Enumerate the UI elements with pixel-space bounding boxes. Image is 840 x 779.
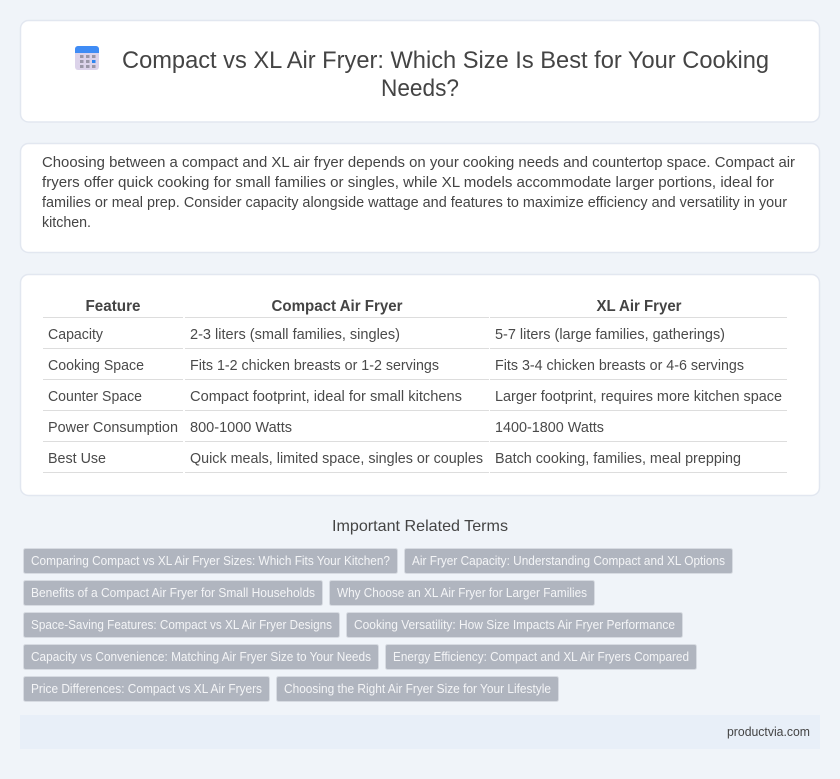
tag 2: Air Fryer Capacity: Understanding Compact and XL Options — [412, 554, 725, 568]
icon: calendar — [75, 46, 99, 70]
row: cooking space — [48, 358, 744, 374]
row: cooking space: Fits 3-4 chicken breasts or 4-6 servings — [495, 358, 744, 374]
row: counter space: Larger footprint, requires more kitchen space — [495, 389, 782, 405]
panel: comparison table — [20, 274, 820, 496]
row: best use: Quick meals, limited space, singles or couples — [190, 451, 483, 467]
intro text — [42, 155, 795, 231]
row: capacity — [48, 327, 725, 343]
tag 3: Benefits of a Compact Air Fryer for Small Households — [31, 586, 315, 600]
row: power consumption: 800-1000 Watts — [190, 420, 292, 436]
row: capacity: Capacity — [48, 327, 104, 343]
intro text: kitchen. — [42, 215, 91, 231]
table header — [86, 298, 682, 315]
tag 10: Choosing the Right Air Fryer Size for Your Lifestyle — [284, 682, 551, 696]
intro text: fryers offer quick cooking for small families or singles, while XL models accommodate larger portions, ideal for — [42, 175, 774, 191]
footer: productvia.com — [727, 725, 810, 739]
tag 9 — [24, 676, 270, 702]
tag 6 — [346, 612, 682, 638]
row: best use: Best Use — [48, 451, 106, 467]
tag 1: Comparing Compact vs XL Air Fryer Sizes: Which Fits Your Kitchen? — [31, 554, 390, 568]
table header: Compact Air Fryer — [272, 298, 402, 315]
related term tags — [24, 548, 732, 702]
heading: related terms: Important Related Terms — [332, 518, 508, 535]
panel: intro paragraph — [20, 144, 820, 252]
tag 3 — [24, 580, 322, 606]
intro text: families or meal prep. Consider capacity alongside wattage and features to maximize efficiency and versatility in your — [42, 195, 787, 211]
row: capacity: 2-3 liters (small families, singles) — [190, 327, 400, 343]
row: best use — [48, 451, 741, 467]
tag 5 — [24, 612, 340, 638]
tag 8 — [386, 644, 696, 670]
tag 5: Space-Saving Features: Compact vs XL Air Fryer Designs — [31, 618, 332, 632]
tag 4 — [330, 580, 594, 606]
title: Compact vs XL Air Fryer: Which Size Is Best for Your Cooking — [122, 47, 769, 74]
tag 10 — [276, 676, 558, 702]
row: power consumption — [48, 420, 604, 436]
title: Needs? — [381, 75, 459, 102]
row: counter space: Compact footprint, ideal for small kitchens — [190, 389, 462, 405]
table grid lines — [43, 318, 787, 472]
tag 1 — [24, 548, 398, 574]
tag 2 — [404, 548, 732, 574]
row: best use: Batch cooking, families, meal prepping — [495, 451, 741, 467]
row: cooking space: Fits 1-2 chicken breasts or 1-2 servings — [190, 358, 439, 374]
row: counter space: Counter Space — [48, 389, 142, 405]
footer — [20, 715, 820, 749]
tag 4: Why Choose an XL Air Fryer for Larger Families — [337, 586, 587, 600]
row: cooking space: Cooking Space — [48, 358, 144, 374]
row: power consumption: 1400-1800 Watts — [495, 420, 604, 436]
table header: XL Air Fryer — [596, 298, 682, 315]
tag 6: Cooking Versatility: How Size Impacts Air Fryer Performance — [354, 618, 675, 632]
table header: Feature — [86, 298, 141, 315]
tag 8: Energy Efficiency: Compact and XL Air Fryers Compared — [393, 650, 689, 664]
tag 7 — [24, 644, 378, 670]
row: power consumption: Power Consumption — [48, 420, 178, 436]
row: counter space — [48, 389, 782, 405]
title — [122, 47, 769, 102]
row: capacity: 5-7 liters (large families, gatherings) — [495, 327, 725, 343]
tag 7: Capacity vs Convenience: Matching Air Fryer Size to Your Needs — [31, 650, 371, 664]
intro text: Choosing between a compact and XL air fryer depends on your cooking needs and countertop space. Compact air — [42, 155, 795, 171]
tag 9: Price Differences: Compact vs XL Air Fryers — [31, 682, 262, 696]
panel: title — [20, 20, 820, 122]
